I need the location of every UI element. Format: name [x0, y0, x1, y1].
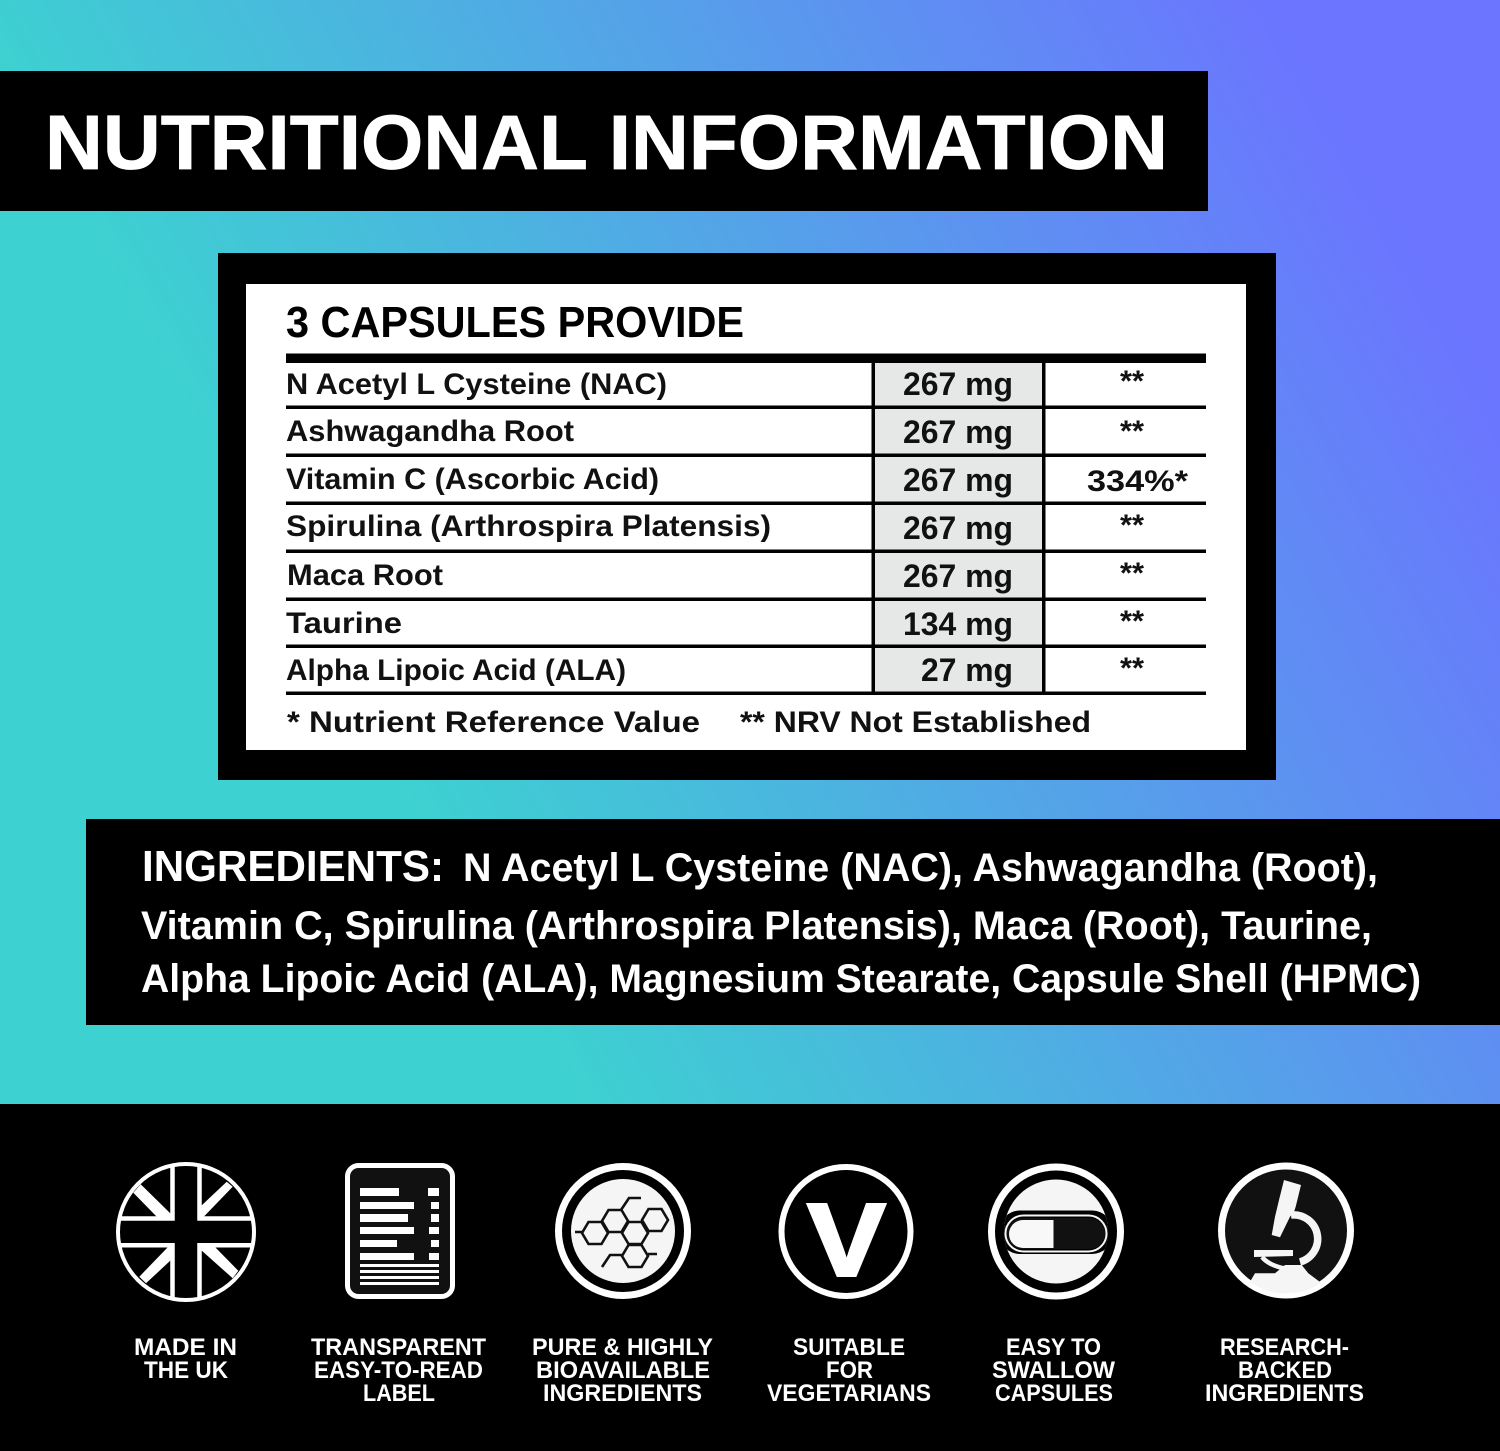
caption: suitable for vegetarians: SUITABLE	[793, 1334, 905, 1361]
table footnotes: ** NRV Not Established	[740, 706, 1091, 739]
icon: molecule	[558, 1166, 688, 1296]
icon: label document	[348, 1166, 452, 1296]
panel: ingredients	[86, 819, 1500, 1025]
caption: suitable for vegetarians: VEGETARIANS	[767, 1380, 931, 1407]
nutrient names: Taurine	[286, 607, 402, 640]
icon: union jack	[118, 1164, 254, 1300]
NRV values: **	[1120, 365, 1144, 398]
caption: research-backed: INGREDIENTS	[1205, 1380, 1364, 1407]
title: NUTRITIONAL INFORMATION	[45, 100, 1168, 186]
caption: pure ingredients: INGREDIENTS	[543, 1380, 702, 1407]
nutrient names: Maca Root	[287, 559, 443, 592]
caption: easy to swallow: SWALLOW	[992, 1357, 1115, 1384]
panel: nutrition table	[218, 253, 1276, 780]
amounts: 267 mg	[903, 414, 1013, 450]
caption: easy to swallow	[992, 1334, 1115, 1407]
nutrient names: Vitamin C (Ascorbic Acid)	[286, 463, 659, 496]
caption: made in the UK: THE UK	[144, 1357, 229, 1384]
caption: research-backed	[1205, 1334, 1364, 1407]
NRV values: **	[1120, 415, 1144, 448]
amounts	[903, 366, 1013, 688]
NRV values: **	[1120, 652, 1144, 685]
nutrient names: Ashwagandha Root	[286, 415, 574, 448]
amounts: 267 mg	[903, 558, 1013, 594]
ingredients list: Vitamin C, Spirulina (Arthrospira Platensis), Maca (Root), Taurine,	[141, 904, 1372, 948]
caption: made in the UK: MADE IN	[134, 1334, 237, 1361]
table footnotes	[287, 706, 1091, 739]
caption: transparent label: EASY-TO-READ	[314, 1357, 483, 1384]
caption: suitable for vegetarians	[767, 1334, 931, 1407]
ingredients list: N Acetyl L Cysteine (NAC), Ashwagandha (Root),	[463, 846, 1378, 890]
icon: microscope	[1222, 1166, 1350, 1302]
NRV values: **	[1120, 509, 1144, 542]
amounts: 267 mg	[903, 366, 1013, 402]
caption: transparent label: LABEL	[363, 1380, 435, 1407]
table footnotes: * Nutrient Reference Value	[287, 706, 700, 739]
nutrient names: Spirulina (Arthrospira Platensis)	[286, 510, 771, 543]
nutrient names: N Acetyl L Cysteine (NAC)	[286, 368, 667, 401]
amounts: 27 mg	[921, 652, 1013, 688]
caption: made in the UK	[134, 1334, 237, 1384]
panel: feature badges	[0, 1104, 1500, 1451]
amounts: 134 mg	[903, 606, 1013, 642]
amount column shading	[875, 363, 1042, 693]
caption: transparent label: TRANSPARENT	[311, 1334, 486, 1361]
NRV values: **	[1120, 605, 1144, 638]
icon: vegetarian V	[782, 1167, 910, 1298]
caption: pure ingredients: BIOAVAILABLE	[536, 1357, 710, 1384]
caption: pure ingredients: PURE & HIGHLY	[532, 1334, 713, 1361]
title banner	[0, 71, 1208, 211]
icon: capsule	[992, 1167, 1120, 1296]
amounts: 267 mg	[903, 462, 1013, 498]
caption: easy to swallow: CAPSULES	[995, 1380, 1113, 1407]
caption: research-backed: RESEARCH-	[1220, 1334, 1349, 1361]
ingredients list: Alpha Lipoic Acid (ALA), Magnesium Stearate, Capsule Shell (HPMC)	[141, 957, 1421, 1001]
caption: research-backed: BACKED	[1238, 1357, 1332, 1384]
caption: suitable for vegetarians: FOR	[826, 1357, 873, 1384]
caption: transparent label	[311, 1334, 486, 1407]
NRV values: **	[1120, 557, 1144, 590]
ingredients list	[141, 846, 1421, 1001]
amounts: 267 mg	[903, 510, 1013, 546]
caption: easy to swallow: EASY TO	[1006, 1334, 1101, 1361]
nutrient names	[286, 368, 771, 687]
NRV values	[1087, 365, 1188, 685]
NRV values: 334%*	[1087, 465, 1188, 498]
caption: pure ingredients	[532, 1334, 713, 1407]
table rules	[286, 354, 1206, 695]
ingredients heading: INGREDIENTS:	[142, 842, 444, 891]
icon: vegetarian V: V	[808, 1182, 886, 1298]
table heading: 3 CAPSULES PROVIDE	[286, 298, 744, 347]
nutrient names: Alpha Lipoic Acid (ALA)	[286, 654, 626, 687]
